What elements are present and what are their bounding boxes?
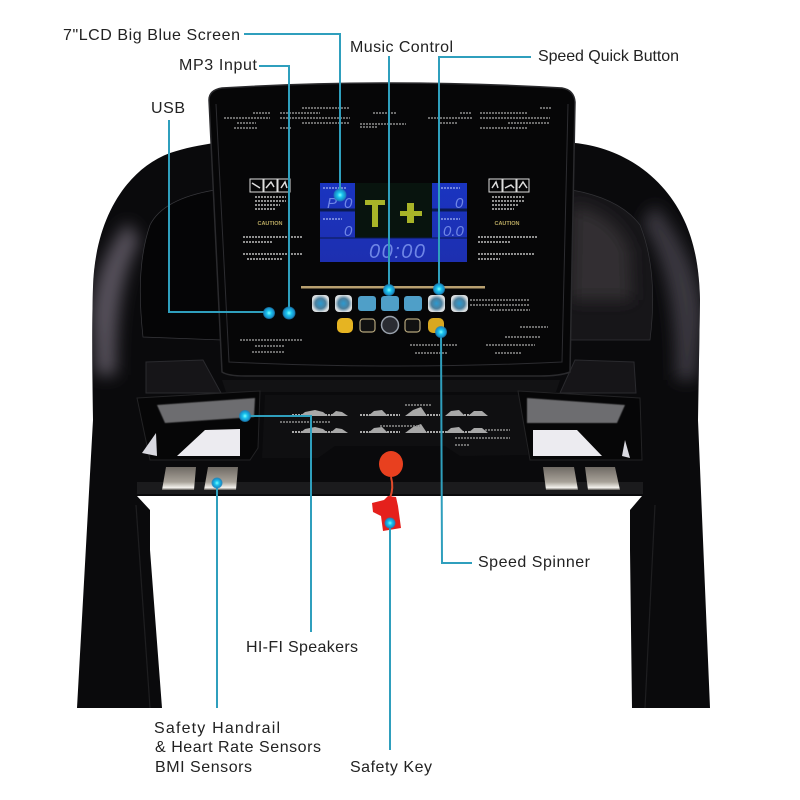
console trays <box>222 380 560 392</box>
right leg edge <box>645 505 655 708</box>
callout: music control <box>350 39 453 296</box>
callout: safety key: Safety Key <box>350 759 432 776</box>
speaker panel printing <box>280 405 510 445</box>
right warning text: CAUTION <box>494 221 520 227</box>
right warning icons <box>489 179 529 192</box>
printed text top <box>224 108 552 128</box>
key tag <box>379 451 403 477</box>
callout: USB <box>151 100 275 319</box>
callout: MP3 input: MP3 Input <box>179 57 258 74</box>
callout: safety key <box>350 518 432 776</box>
lower console body <box>137 360 643 494</box>
callout: USB: USB <box>151 100 185 117</box>
callout: speed quick button: Speed Quick Button <box>538 48 679 65</box>
right white cut-out <box>533 430 602 456</box>
LCD screen: 00:00 <box>369 241 427 263</box>
callout: LCD screen <box>63 27 346 202</box>
callout: speed spinner <box>435 326 591 571</box>
callout: hi-fi speakers <box>239 410 358 656</box>
key clip <box>372 496 401 531</box>
LCD screen: 0 <box>455 195 464 212</box>
callout: safety handrail <box>154 478 321 776</box>
left window recess <box>140 190 222 340</box>
treadmill frame and uprights <box>77 143 710 708</box>
readouts: P <box>327 195 337 212</box>
left warning text <box>243 197 303 259</box>
callout: speed quick button <box>433 48 679 295</box>
callout: music control: Music Control <box>350 39 453 56</box>
left speaker housing <box>137 391 260 460</box>
console housing <box>209 83 575 376</box>
callout: speed spinner: Speed Spinner <box>478 554 591 571</box>
gold divider <box>301 286 485 288</box>
left white cut-out <box>177 429 240 456</box>
callout: safety handrail: Safety Handrail <box>154 720 280 737</box>
control buttons upper row <box>312 295 468 312</box>
left arch highlight <box>92 222 140 375</box>
right speaker housing <box>518 391 642 460</box>
left speaker grille <box>157 398 255 423</box>
display console panel <box>209 83 575 376</box>
callout: LCD screen: 7"LCD Big Blue Screen <box>63 27 240 44</box>
LCD screen: 0 <box>344 195 353 212</box>
T indicator <box>365 200 385 227</box>
callout: MP3 input <box>179 57 296 320</box>
key cord <box>390 477 392 498</box>
control buttons lower row <box>337 316 444 334</box>
left leg edge <box>136 505 150 708</box>
right handrail sensors <box>543 467 578 490</box>
sensor bar <box>137 482 643 494</box>
left shoulder <box>146 360 221 393</box>
LCD screen: 0 <box>344 223 353 240</box>
callout: hi-fi speakers: HI-FI Speakers <box>246 639 358 656</box>
LCD screen: 0.0 <box>443 223 465 240</box>
callout: safety handrail: & Heart Rate Sensors <box>155 739 321 756</box>
inner bezel <box>216 104 568 366</box>
frame silhouette <box>77 143 710 708</box>
right warning text <box>478 197 538 259</box>
printed text bottom <box>240 300 548 353</box>
callout: safety handrail: BMI Sensors <box>155 759 252 776</box>
LCD screen <box>320 183 467 263</box>
safety key <box>372 451 403 531</box>
plus indicator <box>400 203 422 223</box>
left warning icons <box>250 179 290 192</box>
right shoulder <box>560 360 636 393</box>
right window recess <box>566 190 653 340</box>
right speaker grille <box>527 398 625 423</box>
left warning text: CAUTION <box>257 221 283 227</box>
right arch highlight <box>642 205 702 380</box>
left handrail sensors <box>162 467 196 490</box>
